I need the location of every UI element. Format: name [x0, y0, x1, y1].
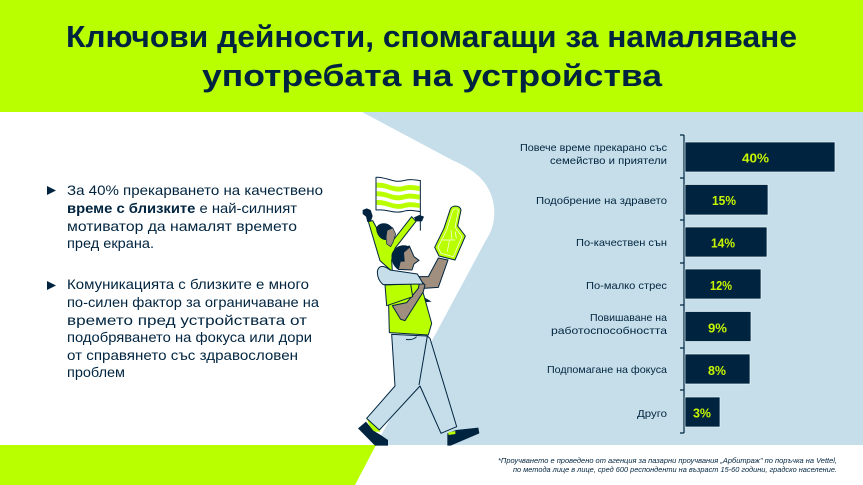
- bar: 15%: 15%: [712, 193, 736, 208]
- axis: [680, 135, 684, 433]
- bar: 40%: 40%: [742, 150, 769, 166]
- paragraph 2: Комуникацията с близките е много: [67, 276, 309, 292]
- header band: [0, 0, 863, 112]
- paragraph 1: пред екрана.: [67, 235, 154, 251]
- paragraph 1: време с близките е най-силният: [67, 200, 298, 216]
- bar: 14%: [576, 227, 767, 257]
- bar: 9%: Повишаване на: [590, 312, 667, 324]
- footnote: [498, 457, 837, 474]
- bar: 3%: Друго: [637, 408, 667, 420]
- bar: 12%: [586, 269, 761, 299]
- paragraph 1: мотиватор да намалят времето: [67, 218, 297, 234]
- bar: 3%: [637, 397, 720, 427]
- foam finger: [435, 206, 465, 260]
- paragraph 1: [67, 182, 323, 251]
- bar: 8%: [547, 354, 750, 384]
- bar: 14%: По-качествен сън: [576, 237, 667, 249]
- paragraph 2: подобряването на фокуса или дори: [67, 329, 312, 345]
- bar: 12%: По-малко стрес: [586, 280, 667, 292]
- illustration: man carrying child with flag and foam finger: [358, 177, 479, 446]
- child: [363, 208, 424, 272]
- bar: 15%: [536, 184, 768, 215]
- panel: light blue background: [362, 112, 863, 445]
- paragraph 2: от справянето със здравословен: [67, 347, 298, 363]
- footnote: *Проучването е проведено от агенция за пазарни проучвания „Арбитраж" по поръчка на Vettel,: [498, 457, 837, 465]
- bar: 9%: [551, 312, 751, 342]
- bar: 14%: 14%: [711, 236, 735, 250]
- icon: flag: [376, 177, 420, 231]
- paragraph 2: по-силен фактор за ограничаване на: [67, 294, 319, 310]
- bar: 15%: Подобрение на здравето: [536, 195, 667, 207]
- bar: 8%: Подпомагане на фокуса: [547, 364, 667, 376]
- paragraph 2: времето пред устройствата от: [67, 312, 308, 328]
- bar: 12%: 12%: [710, 278, 732, 293]
- paragraph 2: [67, 276, 319, 380]
- bar: 3%: 3%: [693, 406, 711, 420]
- icon: bullet 1: [47, 186, 56, 195]
- title: употребата на устройства: [202, 58, 663, 93]
- man upper body: [377, 245, 448, 335]
- bar: 9%: 9%: [708, 320, 727, 336]
- paragraph 2: проблем: [67, 364, 125, 380]
- icon: bullet 2: [47, 281, 56, 290]
- bar: 9%: работоспособността: [551, 325, 667, 337]
- title: [66, 19, 797, 93]
- man lower body: [358, 334, 479, 446]
- bar: 40%: семейство и приятели: [550, 155, 667, 167]
- paragraph 1: За 40% прекарването на качествено: [67, 182, 323, 198]
- footnote: по метода лице в лице, сред 600 респонденти на възраст 15-60 години, градско население.: [513, 466, 837, 474]
- bar: 40%: Повече време прекарано със: [520, 142, 667, 154]
- text block: key points: [47, 182, 323, 380]
- title: Ключови дейности, спомагащи за намаляване: [66, 19, 797, 54]
- bar: 40%: [520, 142, 835, 172]
- footer green shape: [0, 445, 376, 485]
- bar: 8%: 8%: [708, 363, 726, 378]
- bar chart: [520, 135, 835, 433]
